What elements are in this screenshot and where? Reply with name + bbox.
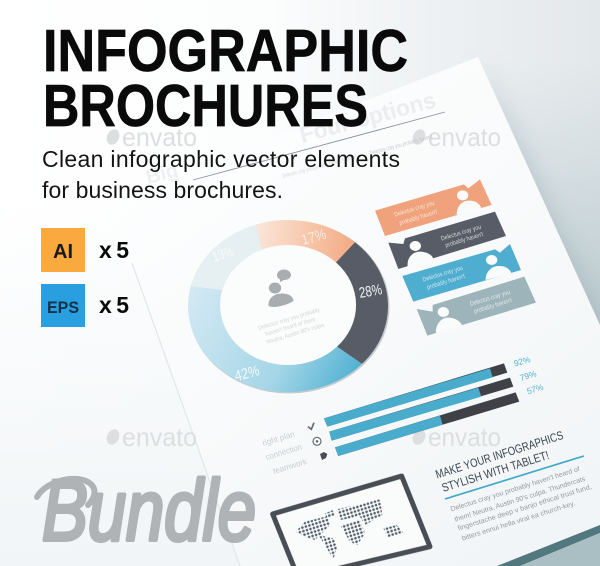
body text: them! Neutra, Austin 90's culpa. Thundercats — [454, 476, 587, 524]
faint heading: Big: Big — [144, 159, 180, 189]
envato watermarks — [104, 122, 501, 452]
tiny header caption right: Delectus cray you probably haven't — [369, 134, 434, 157]
tablet — [273, 476, 430, 566]
watermark top right: envato — [428, 122, 501, 152]
body text: fingerstache deep v banjo ethical trust fund, — [457, 484, 593, 533]
label 42%: 42% — [233, 362, 261, 385]
ribbon: blue — [402, 244, 521, 302]
lower background tint — [0, 200, 600, 566]
world map — [296, 499, 404, 559]
donut centre caption — [258, 307, 326, 346]
icon: puzzle — [320, 452, 327, 460]
page bottom edge — [497, 525, 600, 566]
bar 92% fill — [324, 368, 493, 427]
body text: Delectus cray you probably haven't heard of — [450, 466, 581, 513]
tiny header caption left: Delectus cray you probably haven't heard of — [282, 154, 357, 180]
ribbon: grey-blue: probably haven't — [473, 297, 513, 315]
bar 57% fill — [335, 416, 443, 456]
subtitle: for business brochures. — [42, 177, 283, 203]
ribbon: dark grey — [388, 212, 506, 269]
body text — [450, 466, 593, 543]
heading rule — [445, 456, 584, 499]
heading: make your infographics: STYLISH WITH TABLET! — [440, 448, 551, 495]
AI badge — [41, 228, 85, 272]
label right plan: right plan — [261, 428, 296, 448]
label 17%: 17% — [300, 226, 328, 249]
bar 79% fill — [329, 388, 481, 441]
AI count: x 5 — [99, 237, 129, 263]
watermark top left: envato — [122, 122, 197, 152]
subtitle — [42, 146, 400, 203]
icon: target — [313, 437, 321, 445]
subtitle: Clean infographic vector elements — [42, 146, 400, 172]
body text: bitters ennui hella viral ea church-key. — [461, 500, 576, 543]
people ribbons — [375, 179, 536, 336]
ribbon: grey-blue: Delectus cray you — [469, 289, 511, 308]
bar chart — [324, 354, 545, 456]
segment: 28% — [336, 242, 388, 364]
value 57%: 57% — [526, 382, 545, 396]
ribbon: grey-blue — [417, 277, 536, 336]
ribbon: orange — [375, 179, 492, 236]
segment: 42% — [188, 286, 362, 392]
icon: check — [308, 423, 314, 429]
bundle script lettering — [37, 463, 256, 559]
tablet frame — [273, 476, 430, 566]
ribbon: orange: probably haven't — [399, 209, 438, 227]
title: BROCHURES — [43, 73, 368, 139]
donut edge shadow — [188, 220, 390, 394]
bar 92% track — [324, 363, 507, 427]
label 13%: 13% — [210, 243, 236, 265]
icon: people with speech bubble — [268, 270, 294, 307]
EPS count: x 5 — [99, 292, 129, 318]
segment: 13% — [191, 224, 262, 290]
watermark bottom left: envato — [122, 422, 197, 452]
segment: 17% — [256, 220, 355, 262]
EPS badge: EPS — [47, 298, 79, 317]
ribbon: dark grey: Delectus cray you — [440, 224, 482, 243]
bar labels — [261, 428, 309, 476]
title — [43, 18, 408, 139]
heading: make your infographics: MAKE YOUR INFOGRAPHICS — [434, 428, 565, 482]
bundle word: Bundle — [42, 463, 256, 559]
brochure right page — [110, 57, 600, 566]
lower page content — [261, 354, 593, 566]
page fold line — [132, 263, 240, 566]
AI badge: AI — [53, 241, 73, 263]
page shadow — [478, 57, 600, 360]
donut centre — [220, 245, 356, 365]
donut chart — [188, 220, 390, 394]
donut centre caption: haven't heard of them — [265, 317, 316, 338]
donut centre caption: Neutra, Austin 90's culpa — [266, 322, 326, 346]
title: INFOGRAPHIC — [43, 18, 408, 84]
watermark bottom right: envato — [428, 422, 501, 452]
header rule — [193, 112, 445, 180]
ribbon: dark grey: probably haven't — [445, 231, 484, 249]
value 92%: 92% — [513, 354, 532, 369]
ribbon: blue: probably haven't — [426, 273, 466, 291]
donut centre caption: Delectus cray you probably — [258, 307, 321, 332]
bar 57% track — [335, 392, 519, 456]
label teamwork: teamwork — [272, 456, 309, 476]
faint heading: Four options: Four options — [297, 86, 439, 148]
ribbon: orange: Delectus cray you — [394, 200, 436, 219]
bar 79% track — [329, 378, 513, 441]
value 79%: 79% — [519, 368, 538, 383]
label 28%: 28% — [358, 281, 383, 302]
EPS badge — [41, 284, 85, 327]
page header text — [144, 86, 445, 189]
area below page — [520, 533, 600, 566]
label connection: connection — [264, 441, 303, 462]
background right of the page — [478, 57, 600, 330]
bundle B flourish — [37, 479, 95, 505]
ribbon: blue: Delectus cray you — [422, 265, 464, 284]
